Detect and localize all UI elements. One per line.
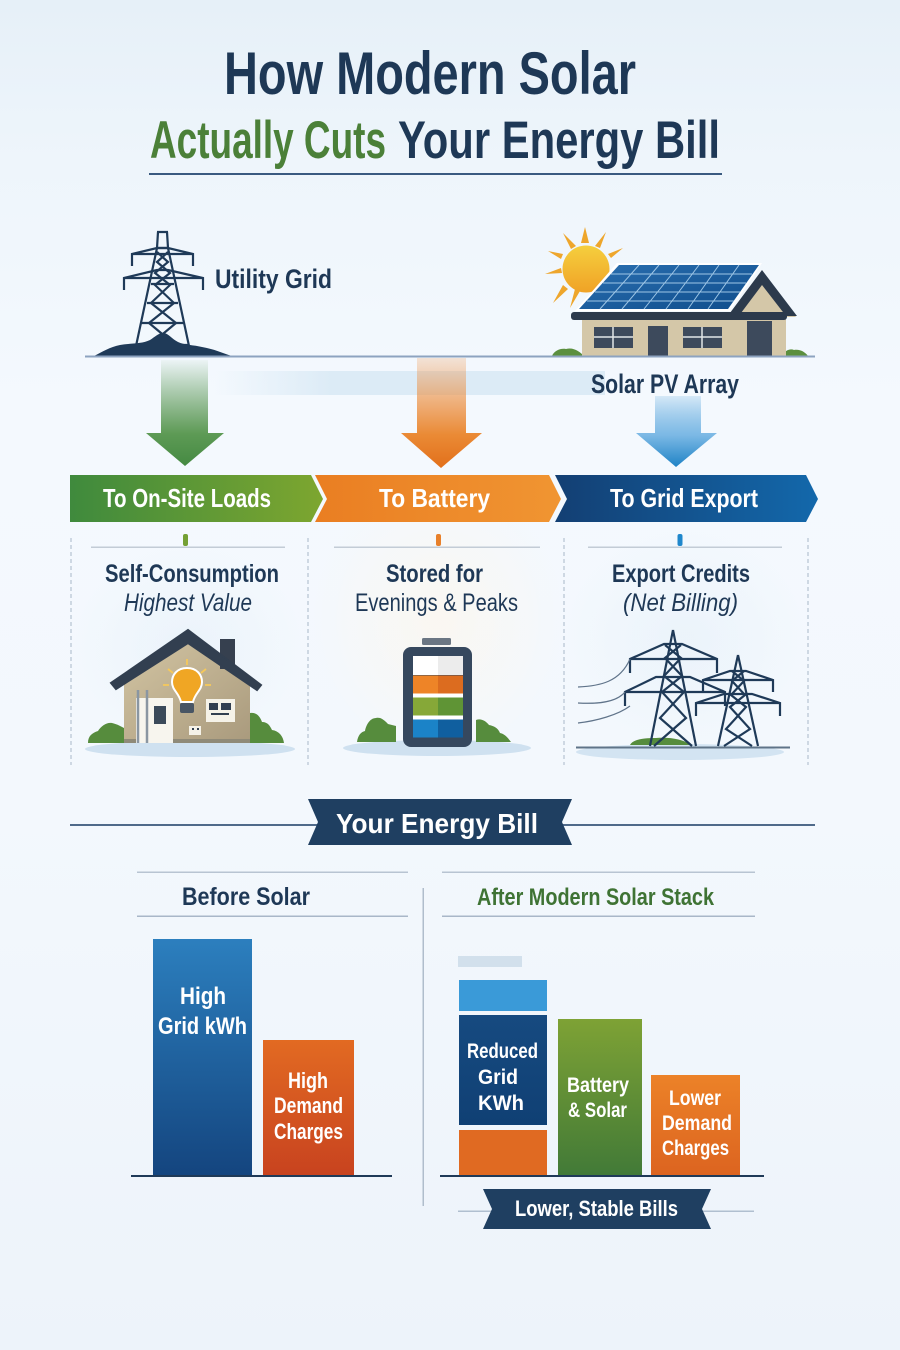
bar: stacked reduced grid kwh: KWh <box>478 1092 524 1115</box>
arrow: to grid export <box>636 396 717 467</box>
bar: high grid kwh <box>153 939 252 1175</box>
bar: battery and solar <box>558 1019 642 1175</box>
banner: to battery: To Battery <box>379 483 490 513</box>
bar: stacked reduced grid kwh: Grid <box>478 1066 518 1089</box>
panel: self-consumption: Self-Consumption <box>105 560 279 588</box>
title: Your Energy Bill <box>398 111 720 170</box>
bar: high demand charges <box>263 1040 354 1175</box>
bar: battery and solar: & Solar <box>568 1099 627 1122</box>
title: How Modern Solar <box>224 40 636 107</box>
title <box>150 40 720 170</box>
panel: stored for evenings and peaks: Evenings & Peaks <box>355 589 518 617</box>
bar: high grid kwh: High <box>180 983 226 1010</box>
icon: utility grid tower <box>94 232 232 356</box>
arrow: to battery <box>401 358 482 468</box>
flow band <box>215 371 605 395</box>
bar: battery and solar: Battery <box>567 1074 629 1097</box>
banner: to on-site loads: To On-Site Loads <box>103 483 271 513</box>
icon: house with solar panels <box>552 263 808 356</box>
section heading: your energy bill: Your Energy Bill <box>336 808 538 839</box>
panel: self-consumption <box>85 534 295 757</box>
bar: high demand charges: Demand <box>274 1093 343 1118</box>
bar: lower demand charges <box>651 1075 740 1175</box>
bar: stacked reduced grid kwh: Reduced <box>467 1040 538 1063</box>
heading: after modern solar stack: After Modern Solar Stack <box>477 884 715 911</box>
panel: export credits <box>576 534 790 760</box>
panel: before solar <box>131 872 408 1177</box>
panel: stored for evenings and peaks: Stored for <box>386 560 483 588</box>
label: utility grid: Utility Grid <box>215 264 332 294</box>
banner: to battery <box>315 475 561 522</box>
bar: lower demand charges: Charges <box>662 1137 729 1160</box>
callout: lower, stable bills <box>458 1189 754 1229</box>
bar: lower demand charges: Lower <box>669 1087 721 1110</box>
banner: to grid export <box>555 475 818 522</box>
bar: lower demand charges: Demand <box>662 1112 732 1135</box>
icon: battery <box>343 638 531 756</box>
ground line <box>85 356 815 358</box>
bar: stacked reduced grid kwh <box>458 956 547 1175</box>
bar: high grid kwh: Grid kWh <box>158 1013 247 1040</box>
banner: to grid export: To Grid Export <box>610 483 758 513</box>
icon: transmission towers <box>576 630 790 760</box>
panel: export credits: Export Credits <box>612 560 750 588</box>
icon: house with light bulb <box>85 630 295 757</box>
bar: high demand charges: High <box>288 1068 328 1093</box>
bar: high demand charges: Charges <box>274 1119 343 1144</box>
panel: after modern solar stack <box>440 872 764 1177</box>
arrow: to loads <box>146 360 224 466</box>
banner: to on-site loads <box>70 475 323 522</box>
label: solar pv array: Solar PV Array <box>591 369 739 399</box>
icon: sun <box>545 227 623 308</box>
title: Actually Cuts <box>150 111 386 170</box>
callout: lower, stable bills: Lower, Stable Bills <box>515 1196 678 1221</box>
section heading: your energy bill <box>70 799 815 845</box>
heading: before solar: Before Solar <box>182 883 310 911</box>
panel: stored for evenings and peaks <box>334 534 540 756</box>
panel: self-consumption: Highest Value <box>124 589 252 617</box>
panel: export credits: (Net Billing) <box>623 589 738 617</box>
